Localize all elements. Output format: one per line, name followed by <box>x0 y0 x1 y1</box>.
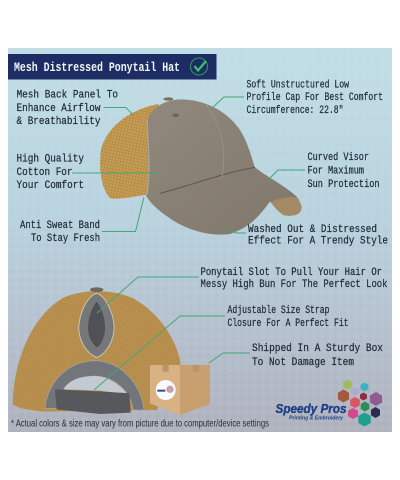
label: sturdy box <box>252 343 383 369</box>
brand tagline: Printing & Embroidery <box>289 416 343 422</box>
slot opening <box>88 302 105 347</box>
label: sturdy box: To Not Damage Item <box>252 357 354 369</box>
brand name: Speedy Pros <box>276 402 347 416</box>
icon: hexagon cluster <box>338 380 382 426</box>
mesh body <box>13 291 181 412</box>
label: unstructured cap: Soft Unstructured Low <box>246 80 349 92</box>
brand logo <box>276 380 382 426</box>
crown side edge <box>147 120 149 195</box>
panel: background <box>8 48 392 432</box>
footnote: * Actual colors & size may vary from picture due to computer/device settings <box>11 418 269 430</box>
label: curved visor: For Maximum <box>308 166 364 178</box>
eyelet <box>172 114 179 117</box>
label: mesh back panel <box>16 90 118 128</box>
label: unstructured cap <box>246 80 383 117</box>
label: washed out: Washed Out & Distressed <box>248 224 377 236</box>
strap opening <box>63 376 128 395</box>
label: mesh back panel: Mesh Back Panel To <box>16 90 118 102</box>
front hat illustration <box>100 97 302 235</box>
box logo sticker <box>156 380 176 400</box>
label: ponytail slot <box>200 267 388 291</box>
label: cotton: High Quality <box>16 154 84 166</box>
strap <box>55 389 131 414</box>
label: cotton <box>16 154 84 192</box>
label: mesh back panel: Enhance Airflow <box>16 103 101 115</box>
top button <box>90 287 103 292</box>
box tape <box>163 365 199 372</box>
box right face <box>180 365 210 415</box>
leader lines <box>72 97 305 390</box>
panel seam <box>207 105 224 178</box>
visor seam <box>160 167 255 193</box>
box illustration <box>150 365 210 415</box>
label: cotton: Cotton For <box>16 167 72 179</box>
label: sweat band <box>20 220 100 245</box>
title bar <box>8 54 216 80</box>
label: sweat band: To Stay Fresh <box>31 233 100 245</box>
ponytail slot <box>79 293 114 357</box>
label: unstructured cap: Circumference: 22.8" <box>246 105 344 117</box>
back hat illustration <box>13 287 181 414</box>
label: mesh back panel: & Breathability <box>16 116 101 128</box>
label: strap: Adjustable Size Strap <box>228 305 330 317</box>
icon: check mark <box>190 58 208 75</box>
label: sturdy box: Shipped In A Sturdy Box <box>252 343 383 355</box>
visor underside <box>271 197 302 216</box>
crown button <box>163 97 173 101</box>
label: curved visor: Curved Visor <box>308 152 369 164</box>
label: curved visor: Sun Protection <box>308 179 380 191</box>
label: sweat band: Anti Sweat Band <box>20 220 100 232</box>
label: cotton: Your Comfort <box>16 180 84 192</box>
label: washed out <box>248 224 388 248</box>
label: strap <box>228 305 348 330</box>
crown and visor <box>146 99 302 235</box>
box left face <box>150 365 180 415</box>
label: strap: Closure For A Perfect Fit <box>228 318 348 330</box>
title: Mesh Distressed Ponytail Hat <box>14 61 180 75</box>
arch <box>45 361 144 410</box>
mesh back panel <box>100 104 160 199</box>
label: curved visor <box>308 152 380 191</box>
